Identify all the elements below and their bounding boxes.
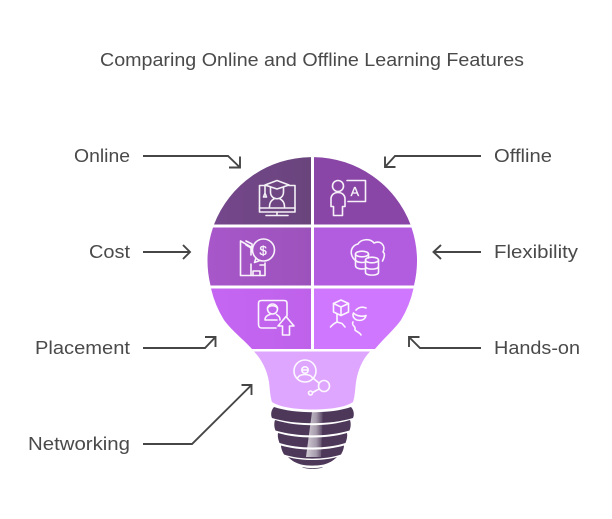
icon: teacher at board: A bbox=[350, 184, 360, 199]
bulb segment: Networking bbox=[254, 352, 370, 410]
label: Flexibility: Flexibility bbox=[494, 241, 579, 262]
arrow: Placement bbox=[143, 337, 216, 348]
label: Cost: Cost bbox=[89, 241, 130, 262]
label: Online: Online bbox=[74, 145, 130, 166]
icon: online learning monitor bbox=[260, 180, 295, 216]
bulb base highlight bbox=[306, 412, 323, 457]
icon: cost building and dollar bubble: $ bbox=[260, 243, 268, 258]
bulb segment: Online bbox=[214, 157, 311, 224]
arrow: Flexibility bbox=[434, 245, 481, 259]
bulb segment: Placement bbox=[211, 288, 311, 349]
bulb segment: Flexibility bbox=[314, 228, 417, 286]
label: Hands-on: Hands-on bbox=[494, 337, 580, 358]
icon: teacher at board bbox=[331, 180, 366, 216]
arrow: Online bbox=[143, 156, 240, 168]
icon: hands-on box and hand bbox=[330, 300, 366, 335]
arrow: Hands-on bbox=[409, 337, 481, 348]
arrow: Networking bbox=[143, 385, 252, 444]
label: Offline: Offline bbox=[494, 145, 552, 166]
title: Comparing Online and Offline Learning Features bbox=[100, 49, 524, 70]
icon: networking person bbox=[294, 360, 330, 395]
bulb segment: Hands-on bbox=[314, 288, 414, 349]
icon: cost building and dollar bubble bbox=[240, 239, 274, 276]
icon: placement profile with arrow bbox=[258, 300, 294, 335]
bulb segment: Cost bbox=[208, 228, 311, 286]
arrow: Offline bbox=[385, 156, 481, 167]
arrow: Cost bbox=[143, 245, 190, 259]
bulb screw base bbox=[271, 407, 354, 469]
light bulb bbox=[208, 157, 417, 469]
label: Placement: Placement bbox=[35, 337, 130, 358]
bulb segment: Offline bbox=[314, 157, 410, 224]
icon: cloud databases bbox=[351, 240, 384, 275]
label: Networking: Networking bbox=[28, 433, 130, 454]
